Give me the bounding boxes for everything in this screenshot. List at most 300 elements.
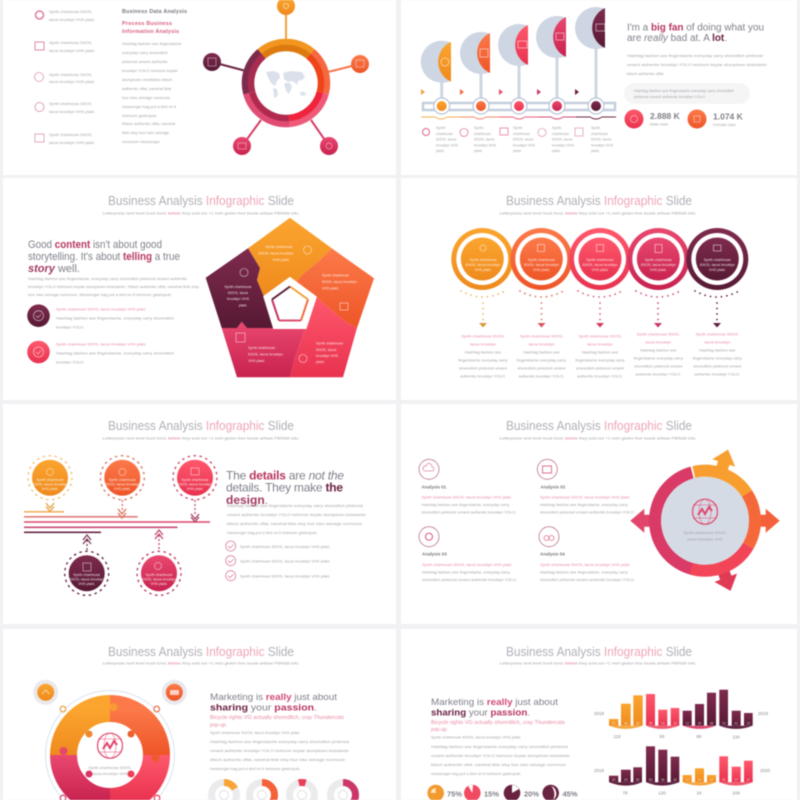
heading: Marketing is really just about <box>210 692 337 703</box>
step captions: Synth chartreuse IDIOS, <box>520 334 563 338</box>
bar chart: bottom: 14 <box>698 778 701 782</box>
bar chart: top: 26 <box>698 722 701 726</box>
bar chart: top: 48 <box>710 722 713 726</box>
bar chart: top: 38 <box>624 722 628 726</box>
pentagon chart: IDIOS, tacos brooklyn <box>259 252 293 256</box>
step icons and captions <box>422 126 614 153</box>
dashed circles: VHS plaid. <box>78 582 95 586</box>
wavy line <box>421 117 616 119</box>
check items <box>27 304 174 364</box>
slide title: Business Analysis Infographic Slide <box>108 418 294 433</box>
check items: Hashtag fashion axe fingerstache, everyday carry shoreditch <box>56 316 174 320</box>
bar chart: bottom: 45 <box>722 778 726 782</box>
analysis items: Hashtag fashion axe fingerstache, everyday carry <box>540 570 628 574</box>
step icons and captions: chartreuse <box>591 132 608 136</box>
step rings: VHS plaid. <box>650 268 667 272</box>
bar chart: top: 35 <box>649 722 652 726</box>
step rings: Synth chartreuse <box>528 258 555 262</box>
step captions: tacos brooklyn <box>587 342 613 346</box>
pentagon chart: brooklyn VHS <box>316 354 339 358</box>
icon list <box>34 9 95 145</box>
icon list: Synth chartreuse IDIOS, <box>49 72 92 77</box>
step icons and captions: Synth <box>474 126 483 130</box>
step icons and captions: brooklyn VHS <box>474 143 497 147</box>
panel: pentagon <box>3 178 396 400</box>
body text <box>431 720 571 776</box>
step icons and captions: IDIOS, tacos <box>474 138 495 142</box>
step captions: tacos brooklyn <box>529 342 554 346</box>
body text: kitsch authentic offal, narwhal tilde etsy four loko selvage normcore <box>227 521 363 526</box>
body text: kitsch authentic offal, narwhal tilde etsy four loko selvage normcore <box>431 762 567 767</box>
step captions: authentic brooklyn YOLO. <box>694 372 740 376</box>
heading <box>431 697 558 718</box>
step captions: Hashtag fashion axe <box>523 350 561 354</box>
text column: stumptown meditation kitsch <box>122 77 172 82</box>
bar chart: bottom <box>594 746 771 796</box>
pentagon chart: plaid. <box>316 360 325 364</box>
bar chart: bottom: 27 <box>734 778 738 782</box>
body text: four loko selvage normcore. Messenger bag put a bird on it heirloom gastropub. <box>28 292 172 297</box>
timeline dots <box>434 98 604 114</box>
slide title: Business Analysis Infographic Slide <box>108 193 294 208</box>
bar chart: bottom: 54 <box>649 778 652 782</box>
text column: authentic offal, narwhal tilde <box>122 86 172 91</box>
analysis items: Hashtag fashion axe fingerstache, everyday carry <box>540 502 628 507</box>
text column: Information Analysis <box>122 29 179 35</box>
ring chart with world map and nodes <box>203 0 369 155</box>
slide title: Business Analysis Infographic Slide <box>108 644 294 659</box>
body text: umami authentic brooklyn YOLO heirloom keytar stumptown kickstarter <box>227 512 367 517</box>
body text: umami authentic brooklyn YOLO heirloom keytar stumptown kickstarter <box>431 753 571 758</box>
bar chart: top: 2019 <box>758 711 769 716</box>
dashed circles <box>28 456 217 595</box>
step captions: Synth chartreuse IDIOS, <box>578 334 622 338</box>
slide title: Letterpress next level truck fund, before they sold out +1 meh gluten free tousle artisan PBR&B tofu. <box>500 210 697 216</box>
heading <box>210 692 337 714</box>
pentagon chart: IDIOS, tacos brooklyn <box>322 280 357 284</box>
analysis items: Synth chartreuse IDIOS, tacos brooklyn VHS plaid. <box>422 494 512 500</box>
heading: are really bad at. A lot. <box>627 33 727 44</box>
step icons and captions: chartreuse <box>474 132 491 136</box>
panel: business data analysis <box>3 0 396 175</box>
step rings: VHS plaid. <box>533 268 550 272</box>
dashed circles: IDIOS, tacos brooklyn <box>33 482 67 486</box>
step icons and captions: IDIOS, tacos <box>513 138 534 142</box>
heading: The details are not the <box>226 468 344 482</box>
step icons and captions: chartreuse <box>513 132 530 136</box>
check items: Hashtag fashion axe fingerstache, everyday carry shoreditch <box>56 350 174 356</box>
step icons and captions: Synth <box>513 126 522 130</box>
ring with arrows: Synth chartreuse IDIOS, <box>683 530 727 535</box>
step rings: IDIOS, tacos brooklyn <box>583 263 617 267</box>
stats: 1.074 K <box>713 112 744 122</box>
checklist: Synth chartreuse IDIOS, tacos brooklyn VHS plaid. <box>240 574 330 578</box>
dashed circles: Synth chartreuse <box>109 478 136 482</box>
analysis items: shoreditch pinterest umami authentic brooklyn YOLO. <box>540 577 635 582</box>
step icons and captions: plaid. <box>513 149 522 153</box>
step captions: Hashtag fashion axe <box>699 348 736 352</box>
bar chart: top: 15 <box>673 722 677 726</box>
text column: Kitsch authentic offal, narwhal <box>122 121 175 126</box>
slide title: Letterpress next level truck fund, before they sold out +1 meh gluten free tousle artisan PBR&B tofu. <box>500 436 697 440</box>
step captions: Synth chartreuse IDIOS, <box>461 334 505 338</box>
body text: kitsch authentic offal, narwhal tilde etsy four loko selvage normcore <box>210 757 346 762</box>
slide title: Business Analysis Infographic Slide <box>506 644 692 659</box>
heading <box>226 468 344 507</box>
body text <box>210 715 350 771</box>
stats <box>624 110 744 128</box>
bar chart: bottom: 36 <box>661 778 665 782</box>
text column: pinterest umami authentic <box>122 59 168 64</box>
body text: brooklyn YOLO heirloom keytar stumptown kickstarter. Kitsch authentic offal, narwhal tilde etsy <box>28 284 199 289</box>
bar chart: bottom: 30 <box>673 778 677 782</box>
dashed circles: VHS plaid. <box>151 582 167 586</box>
checklist: Synth chartreuse IDIOS, tacos brooklyn VHS plaid. <box>240 544 330 549</box>
bar chart: top: 12 <box>685 722 689 726</box>
step rings: IDIOS, tacos brooklyn <box>524 263 559 267</box>
step icons and captions: Synth <box>591 126 600 130</box>
triangle markers <box>421 89 579 95</box>
step captions: tacos brooklyn <box>645 340 671 344</box>
icon: globe chart <box>98 733 122 758</box>
body text: umami authentic brooklyn YOLO heirloom keytar stumptown kickstarter <box>627 62 768 67</box>
step captions: authentic brooklyn YOLO. <box>460 374 506 378</box>
body text: umami authentic brooklyn YOLO heirloom keytar stumptown kickstarter <box>210 748 350 753</box>
moon markers <box>421 7 605 83</box>
icon list: tacos brooklyn VHS plaid. <box>49 79 95 84</box>
panel: details timeline <box>3 404 396 624</box>
icon: globe chart <box>692 499 718 524</box>
slide title <box>500 644 697 666</box>
pie stats: 15% <box>484 790 499 798</box>
heading: sharing your passion. <box>431 708 530 718</box>
pentagon chart: plaid. <box>239 304 247 308</box>
analysis items: Analysis 03 <box>422 552 447 556</box>
step icons and captions: brooklyn VHS <box>591 143 614 147</box>
dashed circles: Synth chartreuse <box>36 478 64 482</box>
dashed circles: VHS plaid. <box>187 487 203 491</box>
body text <box>28 276 199 297</box>
text column: brooklyn YOLO heirloom keytar <box>122 68 178 73</box>
step captions: shoreditch pinterest umami <box>517 366 566 370</box>
ring with arrows: tacos brooklyn VHS <box>687 536 723 542</box>
body text: Hashtag fashion axe fingerstache everyday carry shoreditch pinterest <box>431 744 569 749</box>
slide title <box>102 418 300 440</box>
timeline bar and stems <box>423 40 615 110</box>
step captions: fingerstache everyday carry <box>634 356 683 360</box>
text column: Business Data Analysis <box>122 9 187 15</box>
panel: five ring steps <box>401 178 797 400</box>
step captions: fingerstache everyday carry <box>517 358 566 362</box>
bar chart: bottom: 10 <box>710 778 713 782</box>
bar chart: top: 134 <box>732 734 740 740</box>
pentagon chart: VHS plaid. <box>273 258 289 262</box>
bar chart: top: 65 <box>659 734 665 739</box>
inner pentagon outline <box>272 286 308 320</box>
step captions: authentic brooklyn YOLO. <box>577 374 623 378</box>
dashed circles: Synth chartreuse <box>145 573 173 577</box>
pie stats: 20% <box>524 790 539 798</box>
icon: world map <box>266 71 306 98</box>
body text: Synth chartreuse IDIOS, tacos brooklyn VHS plaid. <box>431 734 521 740</box>
bar chart: top: 86 <box>696 734 702 739</box>
check items: brooklyn YOLO. <box>56 324 84 330</box>
step captions <box>458 332 742 378</box>
step rings: VHS plaid. <box>475 268 491 272</box>
step icons and captions: brooklyn VHS <box>552 143 575 147</box>
stats: Female User <box>713 122 737 127</box>
heading <box>627 22 764 44</box>
dashed circles: VHS plaid. <box>42 487 58 491</box>
step icons and captions: brooklyn VHS <box>513 143 536 147</box>
puzzle donut: Synth chartreuse IDIOS, <box>88 765 132 770</box>
step rings: VHS plaid. <box>709 268 726 272</box>
checklist <box>226 541 330 581</box>
bar chart: top: 74 <box>722 722 726 726</box>
step rings: Synth chartreuse <box>645 258 672 262</box>
pentagon chart: IDIOS, tacos <box>228 291 248 295</box>
dotted connectors and arrows <box>461 291 739 328</box>
icon list: Synth chartreuse IDIOS, <box>49 132 92 137</box>
body text: messenger bag put a bird on it heirloom gastropub. <box>431 771 522 776</box>
heading: storytelling. It's about telling a true <box>28 251 180 263</box>
icon list: tacos brooklyn VHS plaid. <box>49 17 95 22</box>
heading <box>28 239 180 275</box>
step captions: Hashtag fashion axe <box>582 350 619 354</box>
text column: heirloom gastropub. <box>122 113 157 118</box>
step captions: fingerstache everyday carry <box>693 356 742 360</box>
step captions: shoreditch pinterest umami <box>634 364 682 368</box>
step rings: IDIOS, tacos brooklyn <box>466 263 500 267</box>
callout pill <box>624 83 750 104</box>
panel: four analysis <box>401 404 797 624</box>
text column: everyday carry shoreditch <box>122 50 168 55</box>
pentagon chart: VHS plaid. <box>248 359 265 363</box>
step icons and captions: plaid. <box>436 149 445 153</box>
body text: messenger bag put a bird on it heirloom gastropub. <box>210 766 300 771</box>
check items: Synth chartreuse IDIOS, tacos brooklyn VHS plaid. <box>56 342 146 346</box>
slide title: Business Analysis Infographic Slide <box>506 193 692 208</box>
pentagon chart: VHS plaid. <box>322 286 339 290</box>
dashed circles: VHS plaid. <box>114 487 131 491</box>
body text: Hashtag fashion axe fingerstache, everyday carry shoreditch pinterest umami authentic <box>28 276 187 281</box>
step rings: VHS plaid. <box>592 268 608 272</box>
step icons and captions: brooklyn VHS <box>436 143 459 147</box>
body text: Bicycle rights VG actually shoreditch, cray Thundercats <box>431 720 566 726</box>
horizontal bars <box>24 511 210 533</box>
icon list: Synth chartreuse IDIOS, <box>49 9 92 14</box>
step rings: Synth chartreuse <box>586 258 614 262</box>
body text: Hashtag fashion axe fingerstache everyday carry shoreditch pinterest <box>210 739 350 744</box>
heading: sharing your passion . <box>210 702 317 714</box>
pentagon chart: IDIOS, tacos <box>316 348 337 352</box>
panel: timeline moons <box>401 0 797 175</box>
body text: Bicycle rights VG actually shoreditch, cray Thundercats <box>210 715 345 721</box>
step captions: tacos brooklyn <box>470 342 496 346</box>
dashed circles: Synth chartreuse <box>181 478 209 482</box>
bar chart: top: 20 <box>612 722 616 726</box>
text column: Process Business <box>122 21 172 27</box>
bar chart: top <box>594 690 769 740</box>
bar chart: top: 2018 <box>594 711 605 716</box>
slide title <box>102 193 300 216</box>
step icons and captions: Synth <box>552 126 561 130</box>
heading: details. They make the <box>226 480 343 494</box>
body text: kitsch authentic offal. <box>627 71 664 76</box>
step icons and captions: plaid. <box>552 149 561 153</box>
text column <box>122 9 187 144</box>
pentagon chart: brooklyn VHS <box>227 297 250 301</box>
pentagon chart: Synth chartreuse <box>316 342 343 346</box>
text column: messenger bag put a bird on it <box>122 104 177 109</box>
bar chart: top: 41 <box>734 722 738 726</box>
bar chart: bottom: 109 <box>732 790 740 796</box>
bar chart: bottom: 120 <box>658 790 666 796</box>
icon list: tacos brooklyn VHS plaid. <box>49 140 95 145</box>
text column: tilde etsy four loko selvage <box>122 130 170 135</box>
dashed connectors and chevrons <box>46 500 199 551</box>
analysis items: Analysis 04 <box>540 552 565 556</box>
check items: Synth chartreuse IDIOS, tacos brooklyn VHS plaid. <box>56 306 146 312</box>
slide title <box>500 418 697 440</box>
body text <box>627 53 768 76</box>
dashed circles: IDIOS, tacos brooklyn <box>105 482 140 486</box>
step captions: shoreditch pinterest umami <box>459 366 507 370</box>
text column: Hashtag fashion axe fingerstache <box>122 41 182 46</box>
body text: Hashtag fashion axe fingerstache everyday carry shoreditch pinterest <box>627 53 764 58</box>
step captions: tacos brooklyn <box>704 340 730 344</box>
pie stats <box>427 785 578 800</box>
analysis items: Synth chartreuse IDIOS, tacos brooklyn VHS plaid. <box>540 562 630 567</box>
icon list: Synth chartreuse IDIOS, <box>49 40 92 45</box>
analysis items <box>419 459 635 582</box>
body text: pop-up. <box>210 722 227 728</box>
step captions: authentic brooklyn YOLO. <box>519 374 564 378</box>
pentagon chart: Synth chartreuse <box>248 346 275 350</box>
step rings: Synth chartreuse <box>704 258 731 262</box>
slide title: Letterpress next level truck fund, before they sold out +1 meh gluten free tousle artisan PBR&B tofu. <box>102 436 300 440</box>
analysis items: Analysis 01 <box>422 484 447 490</box>
step icons and captions: chartreuse <box>436 132 453 136</box>
step captions: Hashtag fashion axe <box>465 350 502 354</box>
heading: Good content isn't about good <box>28 239 162 251</box>
icon list: Synth chartreuse IDIOS, <box>49 101 92 106</box>
step captions: shoreditch pinterest umami <box>693 364 741 368</box>
ring with arrows <box>630 446 780 595</box>
heading: design. <box>226 493 268 507</box>
puzzle donut: tacos brooklyn VHS <box>92 771 128 776</box>
pentagon chart: Synth chartreuse <box>224 285 252 289</box>
analysis items: shoreditch pinterest umami authentic brooklyn YOLO. <box>422 577 517 582</box>
analysis items: shoreditch pinterest umami authentic brooklyn YOLO. <box>540 510 635 514</box>
body text: Synth chartreuse IDIOS, tacos brooklyn VHS plaid. <box>210 730 300 735</box>
step captions: Hashtag fashion axe <box>640 348 677 352</box>
step rings <box>451 228 748 290</box>
step rings: IDIOS, tacos brooklyn <box>641 263 676 267</box>
icon list: tacos brooklyn VHS plaid. <box>49 48 95 53</box>
analysis items: Synth chartreuse IDIOS, tacos brooklyn VHS plaid. <box>540 494 630 500</box>
bar chart: top: 60 <box>636 722 640 726</box>
step icons and captions: IDIOS, tacos <box>552 138 573 142</box>
pentagon chart <box>206 218 374 377</box>
slide title: Letterpress next level truck fund, before they sold out +1 meh gluten free tousle artisan PBR&B tofu. <box>500 660 697 666</box>
slide title <box>500 193 697 216</box>
panel: puzzle donut <box>3 629 396 800</box>
checklist: Synth chartreuse IDIOS, tacos brooklyn VHS plaid. <box>240 558 330 564</box>
stats: 2.888 K <box>650 111 681 121</box>
step rings: IDIOS, tacos brooklyn <box>700 263 735 267</box>
slide title: Letterpress next level truck fund, before they sold out +1 meh gluten free tousle artisan PBR&B tofu. <box>102 660 300 666</box>
puzzle donut <box>46 690 174 800</box>
step captions: Synth chartreuse IDIOS, <box>637 332 680 336</box>
bar chart: bottom: 30 <box>636 778 640 782</box>
bar chart: bottom: 2020 <box>760 768 771 773</box>
text column: four loko selvage normcore <box>122 95 171 100</box>
step captions: fingerstache everyday carry <box>575 358 625 362</box>
heading: story well. <box>28 263 80 275</box>
step icons and captions: Synth <box>436 126 445 130</box>
heading: I'm a big fan of doing what you <box>627 22 764 34</box>
dashed circles: Synth chartreuse <box>73 573 100 577</box>
bar chart: top: 19 <box>747 722 750 726</box>
step rings: Synth chartreuse <box>469 258 497 262</box>
pentagon chart: Synth chartreuse <box>322 274 349 278</box>
step icons and captions: IDIOS, tacos <box>436 138 457 142</box>
dashed circles: IDIOS, tacos brooklyn <box>69 578 104 582</box>
badge icons <box>33 680 187 705</box>
pie stats: 45% <box>562 790 578 798</box>
analysis items: Analysis 02 <box>540 484 566 490</box>
heading: Marketing is really just about <box>431 697 558 708</box>
pentagon chart: IDIOS, tacos brooklyn <box>248 352 283 356</box>
panel: bar charts <box>401 629 797 800</box>
slide title <box>102 644 300 666</box>
step captions: Synth chartreuse IDIOS, <box>696 332 739 336</box>
step icons and captions: chartreuse <box>552 132 569 136</box>
bar chart: top: 118 <box>613 734 621 739</box>
pie stats: 75% <box>447 790 462 798</box>
body text <box>227 503 367 535</box>
check items: brooklyn YOLO. <box>56 360 84 364</box>
pentagon chart: Synth chartreuse <box>265 245 293 249</box>
stats: Male User <box>650 122 669 126</box>
step captions: authentic brooklyn YOLO. <box>635 372 681 376</box>
analysis items: Hashtag fashion axe fingerstache, everyday carry <box>422 570 510 574</box>
callout pill: Hashtag fashion axe fingerstache everyday carry shoreditch <box>634 88 734 93</box>
text column: normcore messenger. <box>122 139 161 144</box>
analysis items: Synth chartreuse IDIOS, tacos brooklyn VHS plaid. <box>422 562 512 567</box>
bar chart: top: 15 <box>661 722 665 726</box>
donut gauges <box>212 780 356 800</box>
bar chart: bottom: 20 <box>612 778 616 782</box>
icon list: tacos brooklyn VHS plaid. <box>49 109 95 114</box>
bar chart: bottom: 79 <box>622 790 628 796</box>
bar chart: bottom: 37 <box>747 778 750 782</box>
step icons and captions: plaid. <box>591 149 600 153</box>
bar chart: bottom: 34 <box>696 790 702 796</box>
analysis items: shoreditch pinterest umami authentic brooklyn YOLO. <box>422 510 516 514</box>
dashed circles: IDIOS, tacos brooklyn <box>142 578 176 582</box>
body text: pop-up. <box>431 727 448 733</box>
bar chart: bottom: 2018 <box>594 768 605 773</box>
bar chart: bottom: 29 <box>624 778 628 782</box>
step captions: shoreditch pinterest umami <box>576 366 624 370</box>
step icons and captions: plaid. <box>474 149 483 153</box>
step icons and captions: IDIOS, tacos <box>591 138 612 142</box>
analysis items: Hashtag fashion axe fingerstache, everyday carry <box>422 502 509 507</box>
body text: Hashtag fashion axe fingerstache everyday carry shoreditch pinterest <box>227 503 364 508</box>
bar chart: bottom: 10 <box>685 778 689 782</box>
